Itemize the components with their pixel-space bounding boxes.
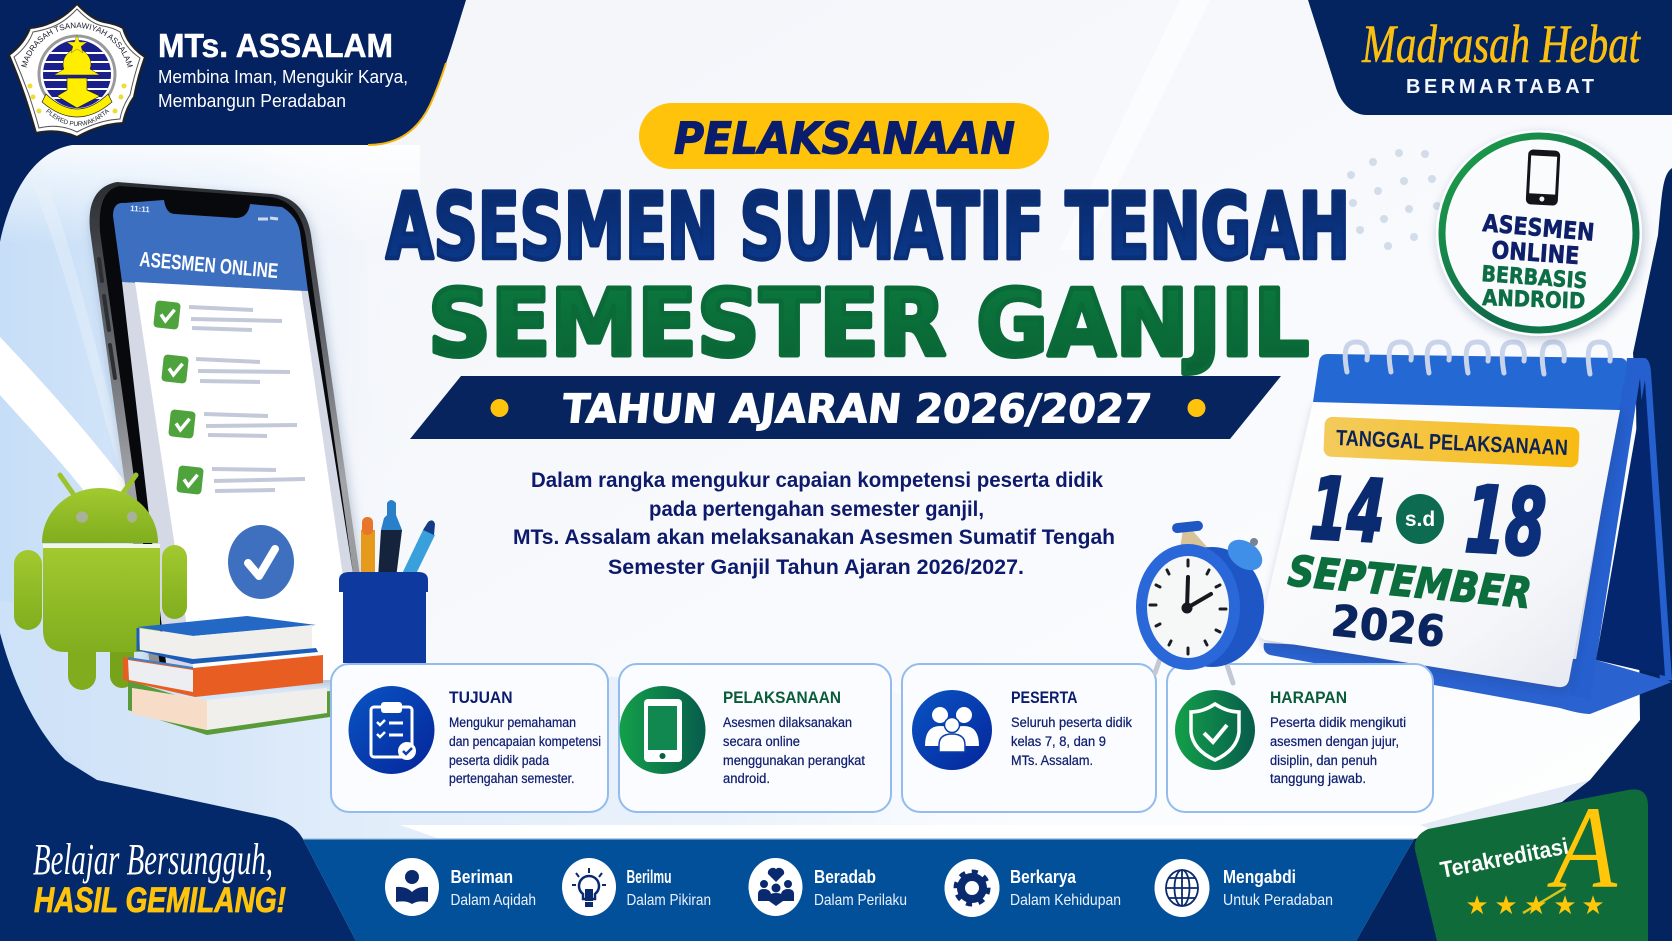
date: 18: 18 xyxy=(1463,466,1548,577)
value: mengabdi: Mengabdi xyxy=(1223,867,1296,887)
checklist xyxy=(153,300,305,495)
calendar header xyxy=(1313,354,1627,410)
pill heading: pelaksanaan xyxy=(639,103,1049,169)
grade swoosh xyxy=(1523,888,1565,913)
card text: asesmen dengan jujur, xyxy=(1270,734,1399,749)
s.d badge: s.d xyxy=(1405,508,1435,531)
calendar xyxy=(1260,342,1672,714)
card: tujuan xyxy=(331,664,608,812)
icon: group of people xyxy=(912,690,992,770)
card text xyxy=(723,715,865,786)
illustration: smartphone xyxy=(90,182,375,680)
header panel: school identity xyxy=(0,0,466,242)
year: 2026 xyxy=(1329,596,1447,658)
accreditation badge xyxy=(1415,782,1648,941)
month: SEPTEMBER xyxy=(1286,546,1534,618)
header panel: motto xyxy=(1308,0,1672,115)
card text xyxy=(449,715,601,786)
star rating: ★ xyxy=(1553,890,1577,920)
card text: android. xyxy=(723,771,770,786)
card text: menggunakan perangkat xyxy=(723,753,865,768)
school name: MTs. ASSALAM xyxy=(158,27,393,64)
value: berkarya: Berkarya xyxy=(1010,867,1077,887)
illustration: stack of books xyxy=(123,616,330,735)
value: berilmu: Berilmu xyxy=(626,867,672,887)
icon: shield check xyxy=(1175,690,1255,770)
card: pelaksanaan xyxy=(619,664,891,812)
value: mengabdi: Untuk Peradaban xyxy=(1223,892,1333,909)
badge text: ONLINE xyxy=(1491,236,1580,270)
card text: Seluruh peserta didik xyxy=(1011,715,1132,730)
intro paragraph: pada pertengahan semester ganjil, xyxy=(649,498,984,521)
badge text xyxy=(1481,209,1595,315)
illustration: android robot xyxy=(14,475,187,690)
confirm check badge xyxy=(228,525,294,599)
date label pill: TANGGAL PELAKSANAAN xyxy=(1336,425,1568,460)
intro paragraph: Semester Ganjil Tahun Ajaran 2026/2027. xyxy=(608,556,1024,579)
card text: Mengukur pemahaman xyxy=(449,715,576,730)
badge: asesmen online berbasis android xyxy=(1436,130,1642,336)
badge text: BERBASIS xyxy=(1481,262,1588,294)
card text: secara online xyxy=(723,734,800,749)
star rating: ★ xyxy=(1494,890,1518,920)
decorative dot cluster xyxy=(1347,149,1444,250)
star rating: ★ xyxy=(1465,890,1489,920)
card text: pertengahan semester. xyxy=(449,771,574,786)
title line 2: SEMESTER GANJIL xyxy=(428,270,1309,377)
value: beriman: Beriman xyxy=(450,867,513,887)
phone screen title: ASESMEN ONLINE xyxy=(139,248,279,283)
banner: tahun ajaran xyxy=(410,376,1281,439)
accreditation badge: Terakreditasi xyxy=(1438,833,1571,883)
illustration: alarm clock xyxy=(1136,520,1268,683)
card text: dan pencapaian kompetensi xyxy=(449,734,601,749)
card: harapan xyxy=(1167,664,1433,812)
phone status bar: 11:11 xyxy=(130,204,151,214)
intro paragraph xyxy=(513,469,1115,579)
card: pelaksanaan: PELAKSANAAN xyxy=(723,688,841,707)
card: peserta: PESERTA xyxy=(1011,688,1078,707)
value: berilmu xyxy=(562,858,711,916)
s.d badge xyxy=(1396,494,1444,544)
footer slogan xyxy=(33,835,286,920)
info cards xyxy=(331,664,1433,812)
value: berkarya xyxy=(944,859,1121,917)
value: beriman: Dalam Aqidah xyxy=(450,892,536,909)
grade letter: A xyxy=(1547,782,1618,913)
card text xyxy=(1011,715,1132,768)
tagline xyxy=(158,67,408,111)
badge text: ASESMEN xyxy=(1481,209,1595,247)
logo: MTs Assalam emblem xyxy=(8,2,146,138)
card: harapan: HARAPAN xyxy=(1270,688,1347,707)
value: beriman xyxy=(385,858,536,916)
pill heading: pelaksanaan: PELAKSANAAN xyxy=(674,114,1015,164)
value: beradab: Beradab xyxy=(814,867,876,887)
card text: Peserta didik mengikuti xyxy=(1270,715,1406,730)
badge text: ANDROID xyxy=(1482,286,1586,315)
logo: MTs Assalam emblem: MADRASAH TSANAWIYAH ASSALAM xyxy=(21,22,133,68)
card text: kelas 7, 8, dan 9 xyxy=(1011,734,1106,749)
footer slogan: Belajar Bersungguh, xyxy=(33,835,273,884)
logo: MTs Assalam emblem: PLERED PURWAKARTA xyxy=(46,108,110,126)
intro paragraph: MTs. Assalam akan melaksanakan Asesmen Sumatif Tengah xyxy=(513,526,1115,549)
motto subtitle: BERMARTABAT xyxy=(1406,76,1594,98)
card text xyxy=(1270,715,1406,786)
date: 14: 14 xyxy=(1308,459,1387,563)
card: peserta xyxy=(902,664,1156,812)
footer slogan: HASIL GEMILANG! xyxy=(34,881,286,920)
value: beradab: Dalam Perilaku xyxy=(814,892,907,909)
card: tujuan: TUJUAN xyxy=(449,688,512,707)
value: berkarya: Dalam Kehidupan xyxy=(1010,892,1121,909)
tagline: Membina Iman, Mengukir Karya, xyxy=(158,67,408,87)
star rating: ★ xyxy=(1524,890,1548,920)
tagline: Membangun Peradaban xyxy=(158,91,346,111)
card text: disiplin, dan penuh xyxy=(1270,753,1377,768)
icon: phone xyxy=(1526,149,1560,206)
star rating xyxy=(1465,890,1605,920)
calendar stand xyxy=(1264,643,1672,714)
banner: tahun ajaran: TAHUN AJARAN 2026/2027 xyxy=(560,387,1154,432)
icon: smartphone xyxy=(620,686,706,774)
value: mengabdi xyxy=(1154,859,1333,917)
calendar page xyxy=(1260,402,1620,687)
card text: tanggung jawab. xyxy=(1270,771,1366,786)
card text: Asesmen dilaksanakan xyxy=(723,715,852,730)
star rating: ★ xyxy=(1581,890,1605,920)
icon: clipboard xyxy=(348,686,434,774)
date label pill xyxy=(1323,416,1580,468)
binding rings xyxy=(1345,342,1610,374)
intro paragraph: Dalam rangka mengukur capaian kompetensi peserta didik xyxy=(531,469,1103,492)
card text: MTs. Assalam. xyxy=(1011,753,1093,768)
value: beradab xyxy=(748,858,907,916)
footer values bar xyxy=(303,838,1414,941)
value: berilmu: Dalam Pikiran xyxy=(626,892,711,909)
card text: peserta didik pada xyxy=(449,753,549,768)
illustration: pen cup xyxy=(339,500,435,663)
